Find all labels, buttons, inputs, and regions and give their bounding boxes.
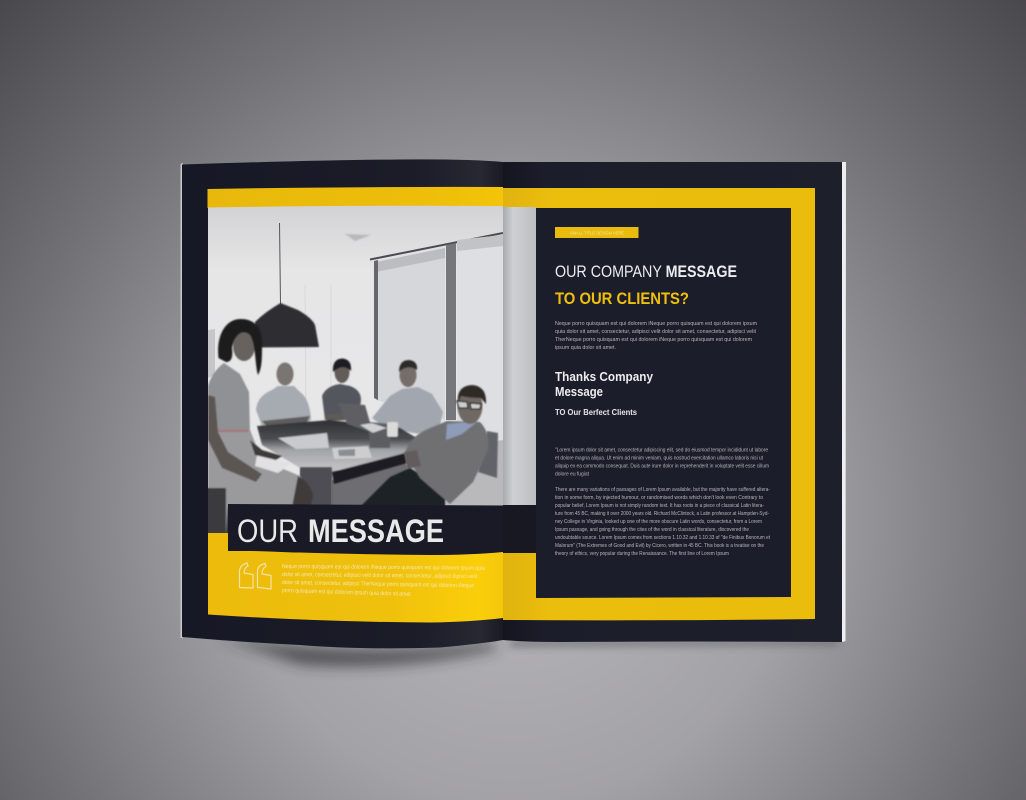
quote text: Neque porro quisquam est qui dolorem iNeque porro quisquam est qui dolorem ipsum quia: [282, 564, 486, 572]
dark content panel: [536, 208, 791, 598]
seated man, bald: [256, 362, 311, 428]
conference table: [257, 420, 420, 507]
photo: team meeting: [208, 205, 503, 535]
chair: [478, 431, 498, 478]
banner continuation: [503, 505, 536, 553]
seated man, striped shirt: [372, 360, 443, 434]
title banner: [228, 504, 503, 555]
intro paragraph: [555, 321, 757, 351]
subheading: TO OUR CLIENTS?: [555, 289, 689, 308]
yellow frame: [503, 188, 815, 620]
quoted paragraph: dolore eu fugiat: [555, 472, 589, 478]
quoted paragraph: aliquip ex ea commodo consequat. Duis aute irure dolor in reprehenderit in voluptate velit esse cillum: [555, 464, 769, 470]
long paragraph: undoubtable source. Lorem Ipsum comes from sections 1.10.32 and 1.10.33 of "de Finibus Bonorum et: [555, 535, 770, 541]
brochure: [180, 159, 846, 648]
banner heading: MESSAGE: [308, 513, 444, 549]
thanks heading: [555, 369, 654, 399]
intro paragraph: quia dolor sit amet, consectetur, adipisci velit dolor sit amet, consectetur, adipisci velit: [555, 329, 756, 335]
long paragraph: Malorum" (The Extremes of Good and Evil) by Cicero, written in 45 BC. This book is a treatise on the: [555, 543, 764, 549]
pendant lamp: [253, 223, 319, 348]
quote text: porro quisquam est qui dolorem ipsum quia dolor sit amet.: [282, 588, 412, 598]
yellow top band: [208, 187, 503, 208]
photo continuation strip: [503, 207, 536, 506]
banner heading: [237, 513, 444, 549]
thanks subheading: TO Our Berfect Clients: [555, 407, 637, 417]
long paragraph: tion in some form, by injected humour, or randomised words which don't look even Contrary to: [555, 495, 763, 501]
long paragraph: theory of ethics, very popular during the Renaissance. The first line of Lorem Ipsum: [555, 551, 729, 557]
long paragraph: ture from 45 BC, making it over 2000 years old. Richard McClintock, a Latin professor at Hampden-Syd-: [555, 511, 769, 517]
laptops and mug: [332, 403, 398, 459]
intro paragraph: TherNeque porro quisquam est qui dolorem iNeque porro quisquam est qui dolorem: [555, 337, 752, 343]
long paragraph: popular belief, Lorem Ipsum is not simply random text. It has roots in a piece of classical Latin litera-: [555, 503, 764, 509]
long paragraph: [555, 487, 770, 557]
thanks heading: Thanks Company: [555, 369, 654, 384]
banner heading: OUR: [237, 513, 298, 549]
intro paragraph: Neque porro quisquam est qui dolorem iNeque porro quisquam est qui dolorem ipsum: [555, 321, 757, 327]
quote text: dolor sit amet, consectetur, adipisci TherNeque porro quisquam est qui dolorem iNeque: [282, 580, 474, 589]
quoted paragraph: "Lorem ipsum dolor sit amet, consectetur adipiscing elit, sed do eiusmod tempor incididunt ut labore: [555, 448, 768, 454]
left page: [182, 159, 503, 648]
quoted paragraph: [555, 448, 769, 478]
long paragraph: ney College in Virginia, looked up one of the more obscure Latin words, consectetur, from a Lorem: [555, 519, 762, 525]
long paragraph: There are many variations of passages of Lorem Ipsum available, but the majority have suffered altera-: [555, 487, 770, 493]
small title pill: SMALL TITLE DESIGN HERE: [570, 230, 624, 236]
yellow bottom panel: [208, 533, 503, 622]
quoted paragraph: et dolore magna aliqua. Ut enim ad minim veniam, quis nostrud exercitation ullamco laboris nisi ut: [555, 456, 763, 462]
small title pill: [555, 227, 638, 238]
page shadow: [215, 636, 838, 666]
thanks heading: Message: [555, 384, 603, 399]
window: [370, 233, 503, 450]
intro paragraph: ipsum quia dolor sit amet.: [555, 345, 616, 351]
quote text: dolor sit amet, consectetur, adipisci velit dolor sit amet, consectetur, adipisci dipisci velit: [282, 572, 477, 580]
page edges: [180, 162, 846, 642]
floor: [208, 440, 503, 534]
heading: OUR COMPANY MESSAGE: [555, 263, 737, 281]
quote text: [282, 564, 486, 598]
seated woman: [322, 358, 361, 422]
ceiling and wall: [208, 234, 370, 398]
right page: [503, 162, 842, 642]
icon: quotation marks: [240, 563, 271, 589]
foreground woman: [208, 319, 313, 534]
foreground man with glasses: [360, 385, 488, 507]
long paragraph: Ipsum passage, and going through the cites of the word in classical literature, discovered the: [555, 527, 749, 533]
